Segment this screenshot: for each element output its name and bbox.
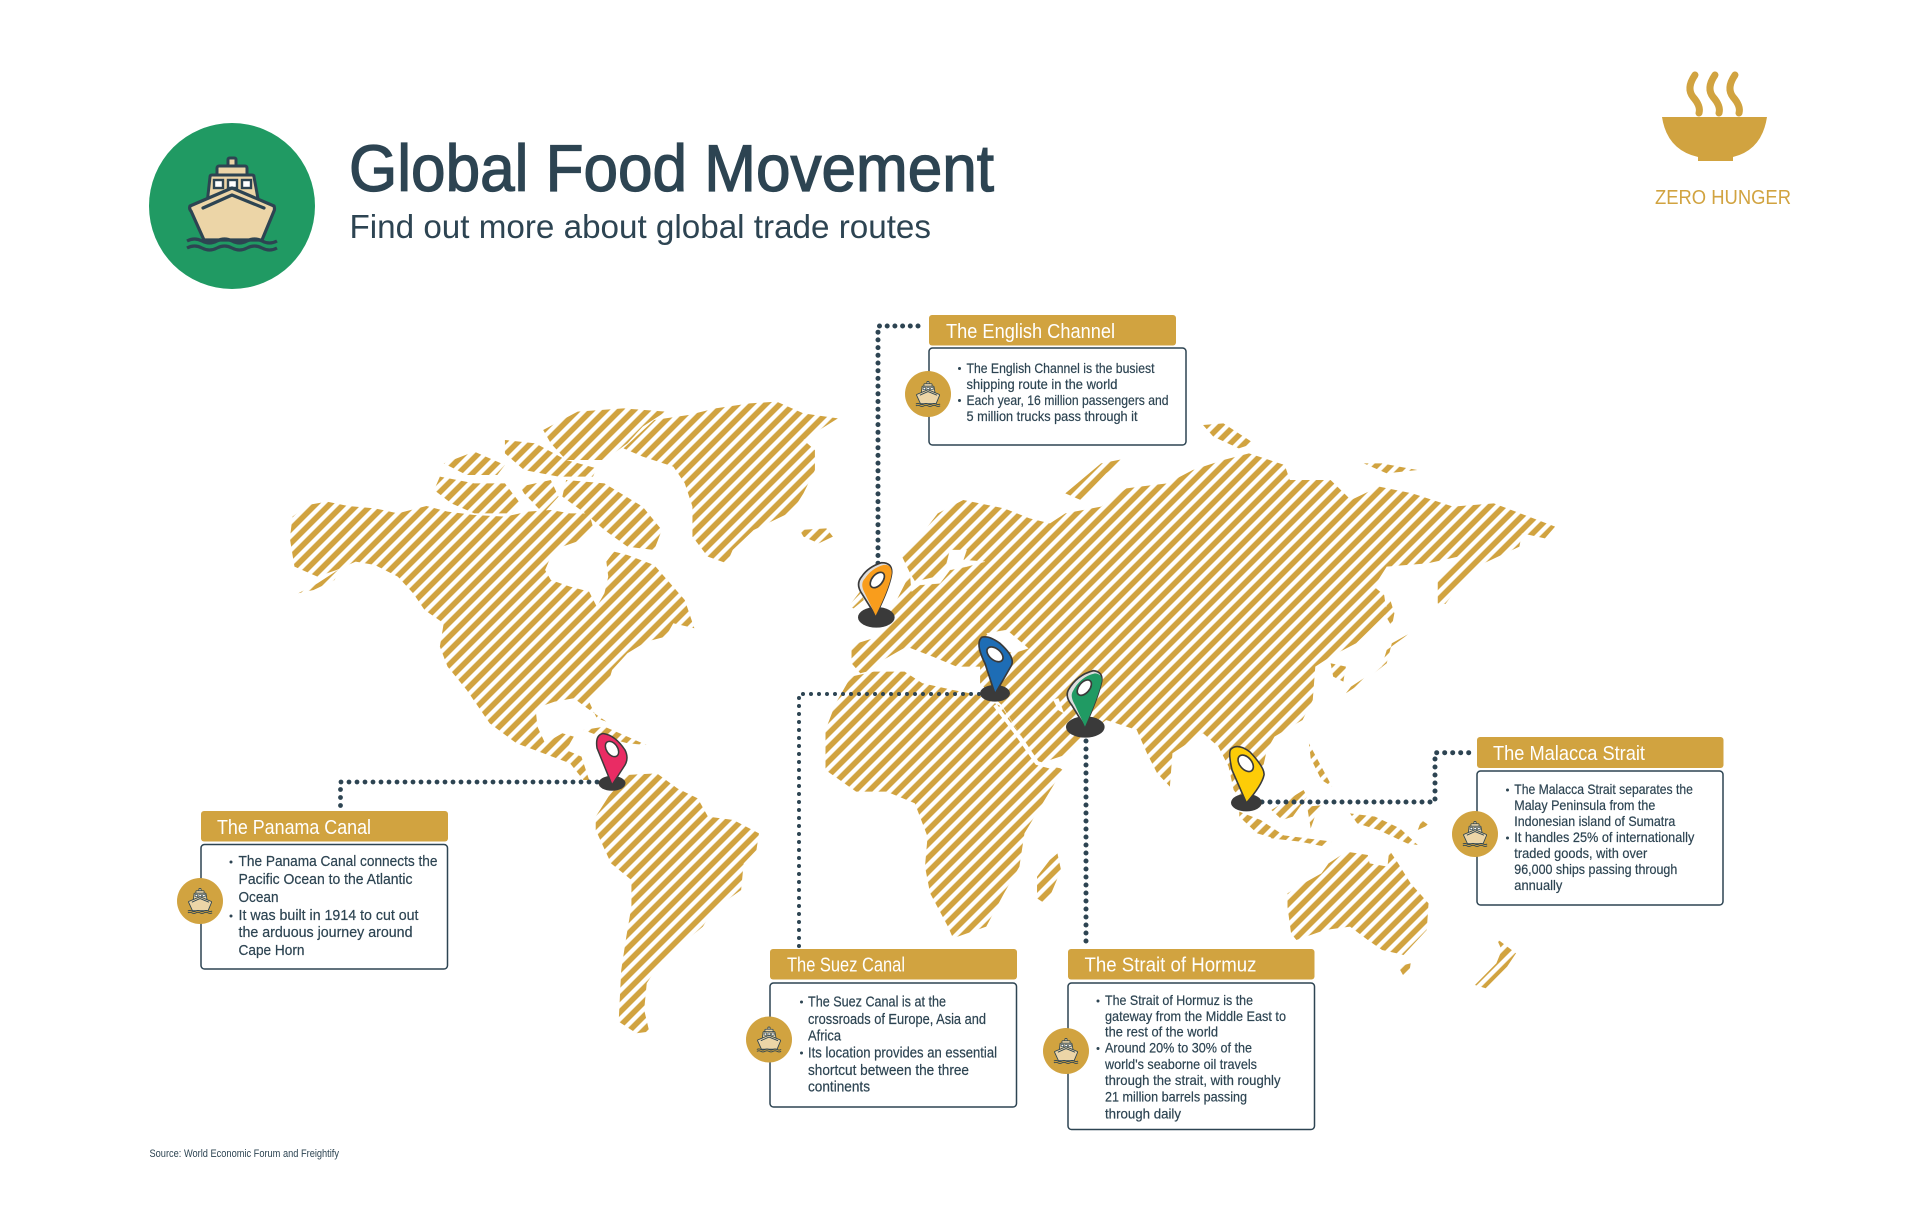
source note: Source: World Economic Forum and Freightify — [150, 1148, 339, 1160]
callout: The Malacca Strait: Malay Peninsula from the — [1514, 797, 1655, 813]
callout: The Strait of Hormuz: through the strait, with roughly — [1105, 1072, 1280, 1088]
callout: The Panama Canal: Pacific Ocean to the Atlantic — [238, 871, 413, 888]
continent: Greenland and Iceland — [620, 400, 840, 565]
callout: The English Channel: shipping route in the world — [966, 376, 1118, 392]
callout: The Panama Canal: The Panama Canal — [217, 816, 371, 839]
callout: The Strait of Hormuz: The Strait of Hormuz — [1084, 954, 1256, 976]
callout: The Panama Canal: It was built in 1914 to cut out — [238, 907, 419, 924]
callout: The Malacca Strait: traded goods, with over — [1514, 845, 1648, 861]
route: Suez Canal — [799, 694, 979, 948]
callout: The Strait of Hormuz: Around 20% to 30% of the — [1105, 1040, 1252, 1056]
callout: The Panama Canal — [177, 811, 448, 969]
continent: Africa and Madagascar — [824, 670, 1064, 945]
logo: zero hunger bowl: ZERO HUNGER — [1655, 187, 1791, 209]
callout: The Malacca Strait: Indonesian island of Sumatra — [1514, 813, 1675, 829]
callout: The Malacca Strait — [1452, 737, 1724, 905]
callout: The English Channel: Each year, 16 million passengers and — [966, 392, 1168, 408]
callout: The Malacca Strait: The Malacca Strait separates the — [1514, 781, 1693, 797]
callout: The Suez Canal: continents — [808, 1079, 870, 1096]
callout: The Strait of Hormuz: The Strait of Hormuz is the — [1105, 992, 1253, 1008]
callout: The Strait of Hormuz: gateway from the Middle East to — [1105, 1008, 1286, 1024]
continent: North America — [288, 408, 696, 810]
callout: The English Channel: The English Channel is the busiest — [966, 360, 1155, 376]
callout: The Suez Canal — [746, 949, 1017, 1107]
pin: Suez Canal — [979, 637, 1012, 702]
callout: The Strait of Hormuz: 21 million barrels passing — [1105, 1089, 1247, 1105]
callout: The Panama Canal: the arduous journey around — [238, 924, 412, 941]
inland seas — [910, 550, 1064, 768]
continent: South America — [594, 770, 764, 1040]
callout: The Malacca Strait: annually — [1514, 877, 1562, 893]
callout: The English Channel: 5 million trucks pass through it — [966, 408, 1138, 424]
callout: The Suez Canal: The Suez Canal — [787, 954, 905, 976]
route: Strait of Hormuz — [1084, 733, 1088, 943]
title: Global Food Movement — [349, 131, 994, 205]
continent: Eurasia — [851, 423, 1555, 796]
world map — [288, 400, 1560, 1060]
header icon: green circle with ship — [149, 123, 315, 289]
callout: The Malacca Strait: The Malacca Strait — [1493, 742, 1645, 765]
callout: The Strait of Hormuz: through daily — [1105, 1105, 1181, 1121]
callout: The Strait of Hormuz: the rest of the world — [1105, 1024, 1218, 1040]
continent: Australia and islands — [1239, 744, 1516, 988]
pin: Panama — [597, 734, 627, 791]
pin: English Channel — [858, 563, 895, 628]
route: Panama Canal — [340, 782, 597, 811]
subtitle: Find out more about global trade routes — [350, 208, 931, 245]
callout: The Strait of Hormuz: world's seaborne oil travels — [1104, 1056, 1257, 1072]
callout: The Suez Canal: Its location provides an essential — [808, 1045, 997, 1062]
callout: The Panama Canal: The Panama Canal connects the — [238, 853, 438, 870]
callout: The English Channel: The English Channel — [946, 320, 1115, 343]
callout: The Malacca Strait: 96,000 ships passing through — [1514, 861, 1677, 877]
callout: The Panama Canal: Ocean — [238, 889, 278, 906]
callout: The Suez Canal: shortcut between the three — [808, 1062, 969, 1079]
callout: The Malacca Strait: It handles 25% of internationally — [1514, 829, 1694, 845]
route: Malacca Strait — [1262, 753, 1476, 802]
pin: Strait of Hormuz — [1066, 671, 1105, 738]
callout: The English Channel — [905, 315, 1186, 445]
callout: The Panama Canal: Cape Horn — [238, 942, 304, 959]
callout: The Suez Canal: The Suez Canal is at the — [808, 994, 946, 1011]
callout: The Suez Canal: Africa — [808, 1028, 842, 1045]
callout: The Strait of Hormuz — [1043, 949, 1314, 1130]
pin: Malacca Strait — [1230, 747, 1264, 811]
callout: The Suez Canal: crossroads of Europe, Asia and — [808, 1011, 986, 1028]
logo: zero hunger bowl — [1655, 75, 1791, 209]
route: English Channel — [878, 326, 918, 572]
